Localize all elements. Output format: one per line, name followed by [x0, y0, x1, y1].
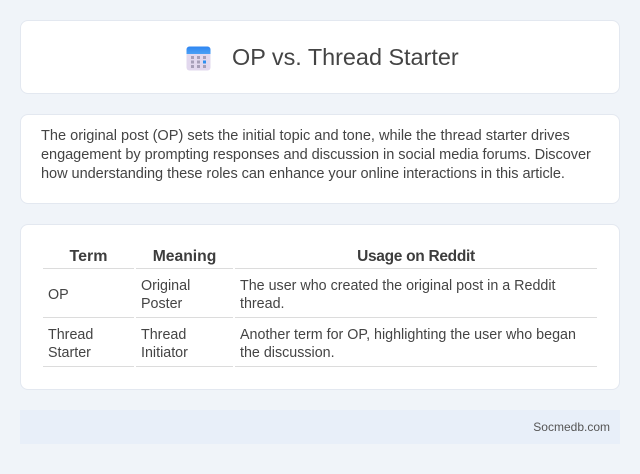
- footer bar: [20, 410, 620, 444]
- footer text: Socmedb.com: [533, 420, 610, 434]
- header: Meaning: Meaning: [153, 248, 216, 265]
- row: OP usage: The user who created the original post in a Reddit: [240, 278, 556, 294]
- row: Thread Starter usage: Another term for OP, highlighting the user who began: [240, 327, 576, 343]
- intro paragraph: engagement by prompting responses and discussion in social media forums. Discover: [41, 147, 591, 163]
- row: Thread Starter meaning: Thread: [141, 327, 186, 343]
- row: Thread Starter meaning: Initiator: [141, 345, 188, 361]
- table: [43, 248, 597, 367]
- row: Thread Starter usage: [240, 327, 576, 361]
- row: Thread Starter term: [48, 327, 93, 361]
- row: OP meaning: [141, 278, 190, 312]
- header: Usage on Reddit: Usage on Reddit: [357, 248, 475, 265]
- row: OP term: OP: [48, 287, 69, 303]
- row: OP usage: thread.: [240, 296, 285, 312]
- title: OP vs. Thread Starter: [232, 44, 459, 70]
- row: OP meaning: Original: [141, 278, 190, 294]
- panel: header: [20, 20, 620, 94]
- row: Thread Starter usage: the discussion.: [240, 345, 335, 361]
- row: OP usage: [240, 278, 556, 312]
- row: Thread Starter term: Starter: [48, 345, 91, 361]
- row: OP meaning: Poster: [141, 296, 182, 312]
- row: Thread Starter meaning: [141, 327, 188, 361]
- panel: intro text: [20, 114, 620, 204]
- header: Term: Term: [70, 248, 107, 265]
- intro paragraph: how understanding these roles can enhance your online interactions in this article.: [41, 166, 565, 182]
- row: Thread Starter term: Thread: [48, 327, 93, 343]
- icon: calendar: [186, 46, 210, 70]
- intro paragraph: [41, 128, 591, 182]
- intro paragraph: The original post (OP) sets the initial topic and tone, while the thread starter drives: [41, 128, 570, 144]
- panel: table card: [20, 224, 620, 390]
